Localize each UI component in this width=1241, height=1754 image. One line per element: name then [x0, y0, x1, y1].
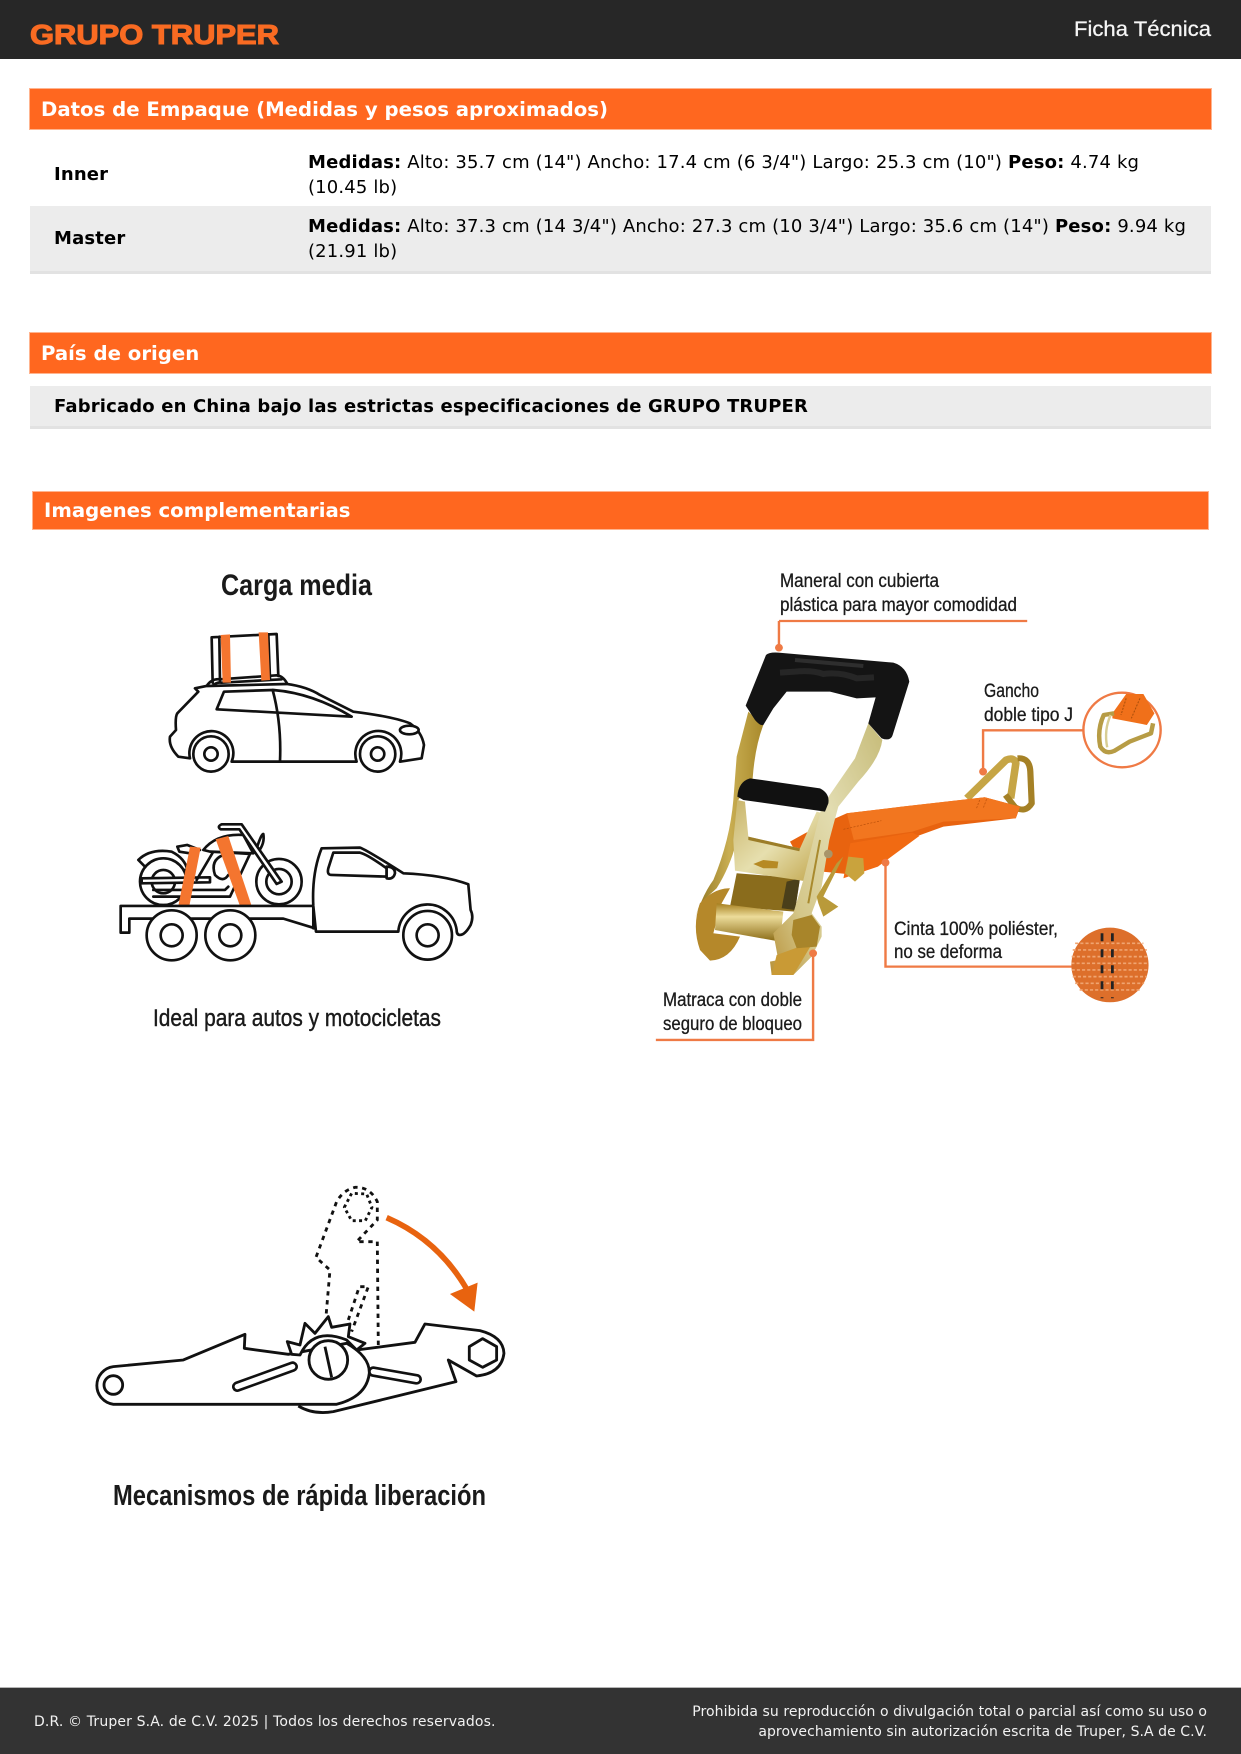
row: Master packaging	[30, 206, 1211, 274]
callout: strap: no se deforma	[894, 942, 1002, 963]
ratchet handle	[695, 653, 909, 975]
icon: car with roof load	[170, 632, 424, 772]
row: country of origin	[30, 386, 1211, 429]
measures: Master: (21.91 lb)	[308, 241, 397, 262]
heading: Imagenes complementarias	[32, 491, 1209, 530]
strap and hook	[790, 758, 1032, 878]
label: Master: Master	[54, 228, 125, 249]
header band	[0, 0, 1241, 59]
callout: handle: Maneral con cubierta	[780, 571, 939, 592]
icon: pickup truck with motorcycle	[121, 824, 472, 960]
callout: hook	[984, 681, 1073, 726]
row: country of origin: Fabricado en China bajo las estrictas especificaciones de GRUPO TRUPER	[54, 396, 808, 417]
icon: ratchet quick-release mechanism	[97, 1187, 504, 1413]
detail circle: polyester weave	[1071, 928, 1149, 1002]
caption: Ideal para autos y motocicletas: Ideal para autos y motocicletas	[153, 1005, 441, 1032]
copyright: D.R. © Truper S.A. de C.V. 2025 | Todos los derechos reservados.	[34, 1714, 496, 1730]
arrow: release direction	[387, 1218, 478, 1312]
callout: ratchet: seguro de bloqueo	[663, 1014, 802, 1035]
legal notice	[692, 1704, 1207, 1740]
callout: strap: Cinta 100% poliéster,	[894, 919, 1058, 940]
document type: Ficha Técnica: Ficha Técnica	[1074, 18, 1211, 41]
title: Carga media: Carga media	[221, 569, 372, 602]
measures: Inner: (10.45 lb)	[308, 177, 397, 198]
callout: hook: Gancho	[984, 681, 1039, 702]
measures: Inner	[308, 152, 1139, 198]
callout: ratchet: Matraca con doble	[663, 990, 802, 1011]
callout: strap	[894, 919, 1058, 963]
legal notice: aprovechamiento sin autorización escrita de Truper, S.A de C.V.	[758, 1724, 1207, 1740]
row: Inner packaging	[54, 152, 1139, 198]
product photo drawing: ratchet strap	[695, 653, 1032, 975]
measures: Master: Medidas: Alto: 37.3 cm (14 3/4") Ancho: 27.3 cm (10 3/4") Largo: 35.6 cm (14") Peso: 9.94 kg	[308, 216, 1186, 237]
measures: Master	[308, 216, 1186, 262]
callout lines with dots	[656, 621, 1083, 1040]
callout: handle: plástica para mayor comodidad	[780, 595, 1017, 616]
heading: País de origen	[29, 332, 1212, 374]
label: Inner: Inner	[54, 164, 108, 185]
footer band	[0, 1687, 1241, 1754]
heading: Datos de Empaque: Datos de Empaque (Medidas y pesos aproximados)	[41, 98, 608, 121]
callout: ratchet	[663, 990, 802, 1035]
heading: Datos de Empaque	[29, 88, 1212, 130]
heading: Imagenes complementarias: Imagenes complementarias	[44, 499, 350, 522]
heading: País de origen: País de origen	[41, 342, 199, 365]
measures: Inner: Medidas: Alto: 35.7 cm (14") Ancho: 17.4 cm (6 3/4") Largo: 25.3 cm (10") Peso: 4.74 kg	[308, 152, 1139, 173]
legal notice: Prohibida su reproducción o divulgación total o parcial así como su uso o	[692, 1704, 1207, 1720]
detail circle: double J hook	[1083, 693, 1161, 767]
caption: Mecanismos de rápida liberación: Mecanismos de rápida liberación	[113, 1480, 486, 1512]
callout: hook: doble tipo J	[984, 705, 1073, 726]
callout: handle	[780, 571, 1017, 616]
